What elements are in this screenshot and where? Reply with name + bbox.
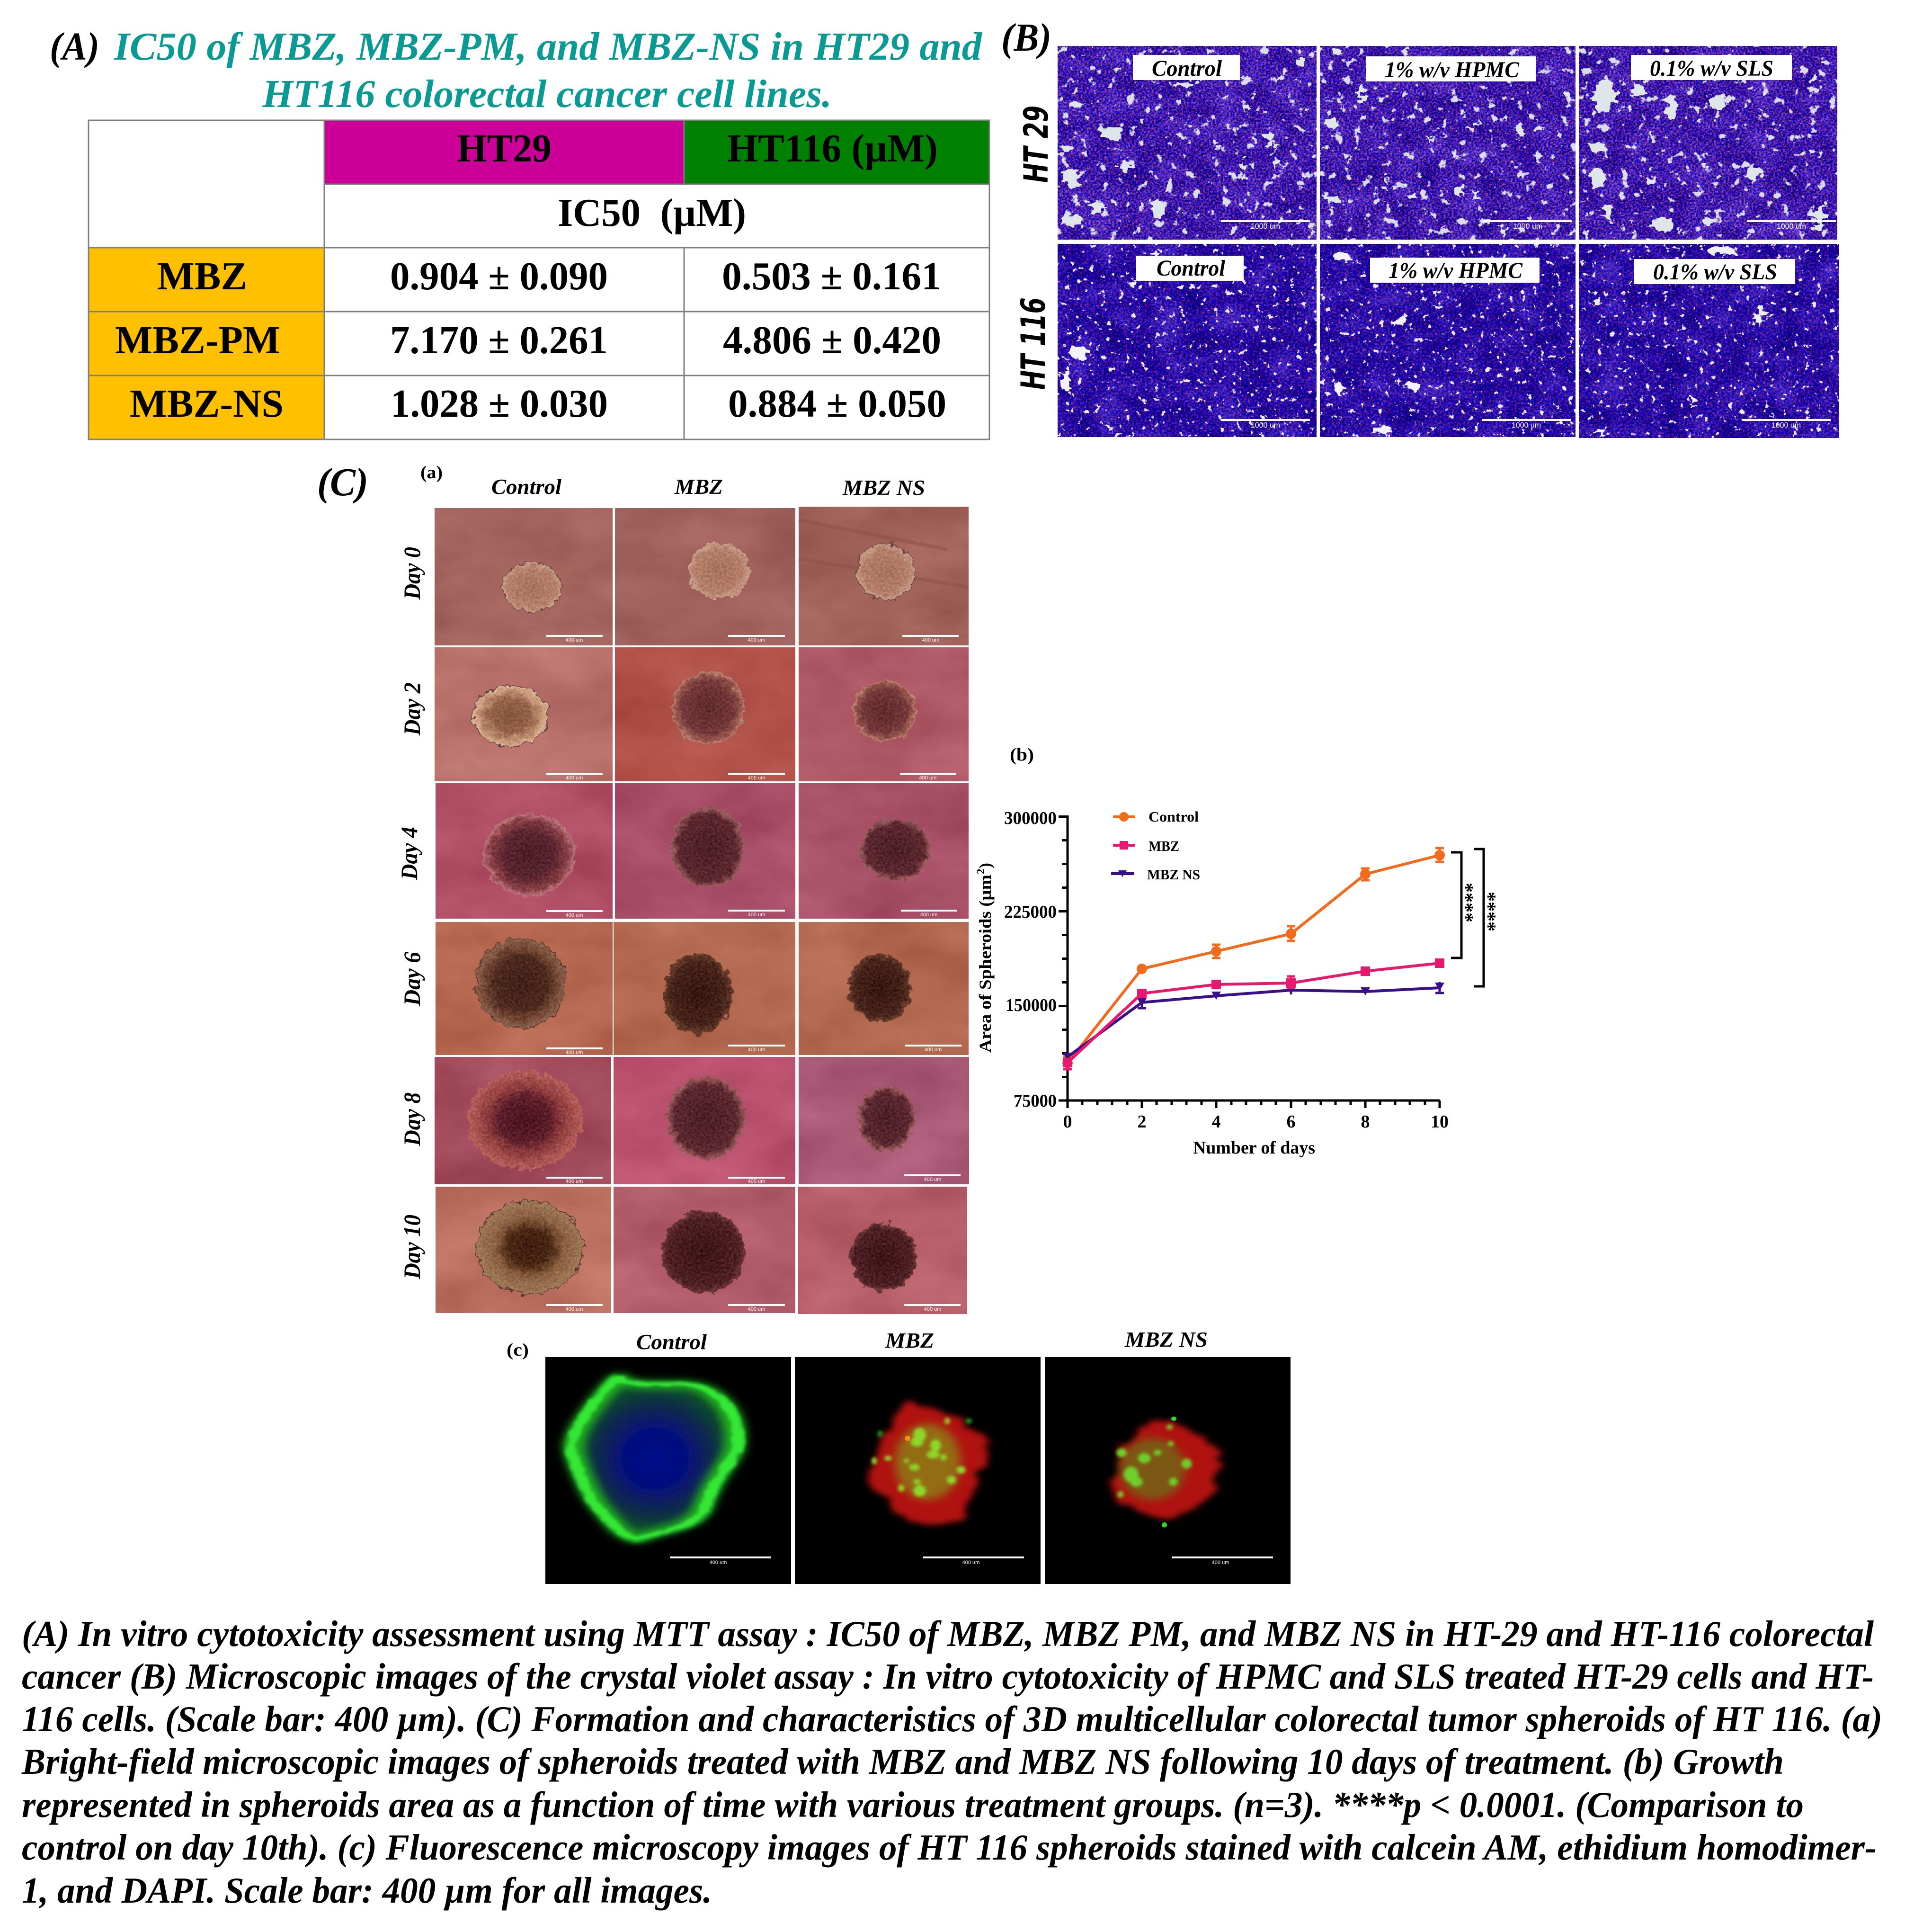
significance bracket MBZ vs control: **** bbox=[1460, 883, 1484, 922]
title: IC50 of MBZ, MBZ-PM, and MBZ-NS in HT29 and bbox=[114, 25, 983, 69]
scale bar bbox=[1742, 419, 1831, 429]
row label HT 29: HT 29 bbox=[1017, 106, 1056, 183]
panel A: IC50 title and table bbox=[50, 25, 989, 439]
tile Day 2 Control: 400 um bbox=[566, 775, 583, 781]
header HT29: HT29 bbox=[457, 126, 552, 170]
tile Day 4 MBZ NS: 400 um bbox=[920, 912, 937, 918]
row MBZ-NS: MBZ-NS bbox=[130, 382, 284, 426]
header HT116: HT116 (µM) bbox=[727, 126, 938, 170]
tile Day 2 Control bbox=[435, 647, 613, 781]
tile Day 6 Control bbox=[436, 922, 613, 1055]
panel letter (C): (C) bbox=[317, 460, 368, 504]
x tick labels: 4 bbox=[1212, 1112, 1220, 1132]
y tick labels: 150000 bbox=[1006, 995, 1057, 1015]
fluorescence MBZ NS bbox=[1045, 1357, 1291, 1584]
panel C(b): spheroid growth line chart bbox=[975, 745, 1506, 1158]
label Control: Control bbox=[1157, 256, 1226, 281]
y tick labels: 225000 bbox=[1004, 902, 1057, 922]
tile Day 8 MBZ: 400 um bbox=[748, 1179, 765, 1184]
panel C(a): bright-field spheroid grid bbox=[317, 460, 969, 1314]
scale bar bbox=[1482, 419, 1571, 429]
tile Day 6 MBZ NS: 400 um bbox=[925, 1047, 942, 1053]
scale bar bbox=[1221, 419, 1310, 429]
tile Day 10 MBZ NS bbox=[798, 1187, 967, 1314]
row label HT 116: HT 116 bbox=[1014, 297, 1053, 390]
tile Day 8 MBZ NS: 400 um bbox=[924, 1177, 941, 1182]
figure caption: 1, and DAPI. Scale bar: 400 µm for all images. bbox=[22, 1870, 712, 1911]
fluorescence Control bbox=[545, 1357, 791, 1584]
row MBZ-NS: 0.884 ± 0.050 bbox=[728, 382, 946, 426]
heading MBZ: MBZ bbox=[885, 1328, 934, 1352]
x tick labels: 0 bbox=[1063, 1112, 1072, 1132]
micrograph HT116 0.1% SLS bbox=[1579, 244, 1839, 438]
tile Day 10 Control: 400 um bbox=[566, 1306, 583, 1312]
tile Day 0 Control: 400 um bbox=[566, 637, 583, 643]
fluorescence MBZ NS: 400 um bbox=[1212, 1560, 1229, 1565]
tile Day 0 MBZ bbox=[615, 508, 795, 645]
legend: MBZ NS bbox=[1147, 866, 1200, 883]
tile Day 2 MBZ NS: 400 um bbox=[919, 775, 936, 781]
tile Day 6 Control: 400 um bbox=[566, 1050, 583, 1055]
header IC50: IC50 (µM) bbox=[558, 191, 746, 235]
sub-panel letter (b): (b) bbox=[1010, 745, 1034, 765]
scale bar: 1000 um bbox=[1251, 421, 1280, 429]
row MBZ bbox=[157, 254, 941, 298]
row MBZ-PM bbox=[115, 318, 941, 362]
x tick labels: 2 bbox=[1137, 1112, 1147, 1132]
y axis label: Area of Spheroids (µm bbox=[976, 875, 995, 1053]
label 1% w/v HPMC: 1% w/v HPMC bbox=[1385, 57, 1520, 82]
y tick labels: 75000 bbox=[1014, 1091, 1057, 1111]
tile Day 4 Control bbox=[436, 783, 613, 919]
sub-panel letter (c): (c) bbox=[507, 1340, 529, 1360]
row MBZ-PM: 7.170 ± 0.261 bbox=[390, 318, 608, 362]
significance bracket MBZ NS vs control bbox=[1474, 849, 1506, 986]
label 0.1% w/v SLS: 0.1% w/v SLS bbox=[1653, 259, 1777, 285]
scale bar: 1000 um bbox=[1512, 421, 1541, 429]
x tick labels bbox=[1063, 1112, 1449, 1132]
figure caption: Bright-field microscopic images of spheroids treated with MBZ and MBZ NS following 10 days of treatment. (b) Growth bbox=[21, 1741, 1784, 1782]
column heading Control: Control bbox=[491, 474, 561, 499]
scale bar: 1000 um bbox=[1251, 223, 1280, 231]
figure caption: control on day 10th). (c) Fluorescence microscopy images of HT 116 spheroids stained with calcein AM, ethidium homodimer- bbox=[22, 1827, 1877, 1868]
x tick labels: 10 bbox=[1431, 1112, 1449, 1132]
column heading MBZ: MBZ bbox=[674, 474, 723, 499]
fluorescence MBZ bbox=[795, 1357, 1041, 1584]
legend: Control bbox=[1148, 808, 1199, 825]
tile Day 0 MBZ: 400 um bbox=[748, 637, 765, 643]
scale bar: 1000 um bbox=[1777, 223, 1806, 231]
title bbox=[114, 25, 983, 116]
row MBZ: MBZ bbox=[157, 254, 247, 298]
tile Day 2 MBZ: 400 um bbox=[748, 775, 765, 781]
tile Day 10 MBZ NS: 400 um bbox=[924, 1306, 941, 1312]
legend bbox=[1111, 808, 1200, 883]
row label Day 4: Day 4 bbox=[396, 827, 422, 880]
heading MBZ NS: MBZ NS bbox=[1124, 1327, 1208, 1351]
axes and ticks bbox=[1059, 815, 1440, 1108]
row MBZ-PM: MBZ-PM bbox=[115, 318, 280, 362]
row MBZ-PM: 4.806 ± 0.420 bbox=[723, 318, 941, 362]
micrograph HT29 control bbox=[1058, 46, 1317, 240]
scale bar bbox=[1221, 220, 1310, 231]
y tick labels bbox=[1004, 808, 1057, 1111]
tile Day 4 MBZ: 400 um bbox=[748, 912, 765, 918]
label 0.1% w/v SLS: 0.1% w/v SLS bbox=[1650, 56, 1773, 81]
tile Day 4 Control: 400 um bbox=[566, 912, 583, 918]
fluorescence MBZ: 400 um bbox=[962, 1560, 979, 1565]
tile Day 4 MBZ NS bbox=[799, 783, 969, 919]
scale bar: 1000 um bbox=[1513, 223, 1542, 231]
y axis label: ) bbox=[976, 863, 995, 868]
tile Day 8 MBZ NS bbox=[799, 1057, 969, 1184]
tile Day 8 Control bbox=[435, 1057, 611, 1184]
tile Day 4 MBZ bbox=[615, 783, 795, 919]
micrograph HT29 1% HPMC bbox=[1320, 46, 1576, 240]
y tick labels: 300000 bbox=[1004, 808, 1057, 828]
tile Day 0 MBZ NS bbox=[799, 507, 969, 645]
title: HT116 colorectal cancer cell lines. bbox=[262, 72, 832, 116]
tile Day 0 Control bbox=[435, 508, 613, 645]
y axis label: 2 bbox=[975, 868, 987, 874]
row label Day 6: Day 6 bbox=[399, 952, 425, 1006]
significance bracket MBZ vs control bbox=[1451, 852, 1484, 958]
tile Day 8 MBZ bbox=[614, 1057, 795, 1184]
figure caption: (A) In vitro cytotoxicity assessment using MTT assay : IC50 of MBZ, MBZ PM, and MBZ NS in HT-29 and HT-116 colorectal bbox=[22, 1613, 1874, 1654]
panel letter (A): (A) bbox=[50, 25, 99, 69]
panel letter (B): (B) bbox=[1001, 16, 1051, 60]
row label Day 0: Day 0 bbox=[399, 547, 425, 600]
row MBZ-NS bbox=[130, 382, 946, 426]
series MBZ bbox=[1063, 958, 1444, 1069]
figure caption bbox=[21, 1613, 1882, 1911]
tile Day 2 MBZ bbox=[615, 647, 795, 781]
tile Day 8 Control: 400 um bbox=[566, 1179, 583, 1184]
IC50 table bbox=[89, 120, 989, 439]
x tick labels: 8 bbox=[1361, 1112, 1370, 1132]
sub-panel letter (a): (a) bbox=[420, 463, 443, 483]
series Control bbox=[1062, 848, 1445, 1069]
label Control bbox=[1136, 256, 1244, 281]
x axis title: Number of days bbox=[1193, 1138, 1315, 1158]
row MBZ-NS: 1.028 ± 0.030 bbox=[391, 382, 608, 426]
tile Day 6 MBZ NS bbox=[799, 922, 969, 1055]
figure caption: 116 cells. (Scale bar: 400 µm). (C) Formation and characteristics of 3D multicellular colorectal tumor spheroids of HT 116. (a) bbox=[22, 1699, 1882, 1739]
tile Day 6 MBZ bbox=[614, 922, 795, 1055]
x tick labels: 6 bbox=[1287, 1112, 1295, 1132]
row MBZ: 0.904 ± 0.090 bbox=[390, 254, 608, 298]
tile Day 10 MBZ: 400 um bbox=[748, 1306, 765, 1312]
figure caption: cancer (B) Microscopic images of the crystal violet assay : In vitro cytotoxicity of HPMC and SLS treated HT-29 cells and HT- bbox=[22, 1656, 1874, 1697]
scale bar: 1000 um bbox=[1772, 421, 1801, 429]
micrograph HT29 0.1% SLS bbox=[1579, 46, 1837, 240]
micrograph HT116 1% HPMC bbox=[1320, 244, 1576, 437]
row MBZ: 0.503 ± 0.161 bbox=[722, 254, 941, 298]
scale bar bbox=[1747, 220, 1836, 231]
label Control: Control bbox=[1152, 56, 1222, 81]
significance bracket MBZ NS vs control: **** bbox=[1483, 892, 1506, 931]
series MBZ NS bbox=[1063, 982, 1444, 1063]
figure caption: represented in spheroids area as a function of time with various treatment groups. (n=3). ****p < 0.0001. (Comparison to bbox=[22, 1784, 1804, 1825]
scale bar bbox=[1483, 220, 1572, 231]
panel B: crystal violet micrographs bbox=[1001, 16, 1839, 438]
label 1% w/v HPMC: 1% w/v HPMC bbox=[1389, 258, 1523, 283]
row label Day 2: Day 2 bbox=[399, 682, 425, 736]
row label Day 10: Day 10 bbox=[399, 1215, 425, 1279]
column heading MBZ NS: MBZ NS bbox=[842, 475, 925, 500]
legend: MBZ bbox=[1148, 838, 1179, 854]
row label Day 8: Day 8 bbox=[399, 1092, 425, 1146]
fluorescence Control: 400 um bbox=[710, 1560, 727, 1565]
tile Day 2 MBZ NS bbox=[799, 647, 969, 781]
micrograph HT116 control bbox=[1058, 244, 1317, 437]
tile Day 10 Control bbox=[436, 1187, 611, 1313]
tile Day 10 MBZ bbox=[614, 1187, 795, 1313]
tile Day 6 MBZ: 400 um bbox=[748, 1047, 765, 1053]
panel C(c): fluorescence micrographs bbox=[507, 1327, 1291, 1584]
tile Day 0 MBZ NS: 400 um bbox=[922, 637, 939, 643]
label Control bbox=[1133, 55, 1240, 81]
heading Control: Control bbox=[636, 1330, 707, 1354]
